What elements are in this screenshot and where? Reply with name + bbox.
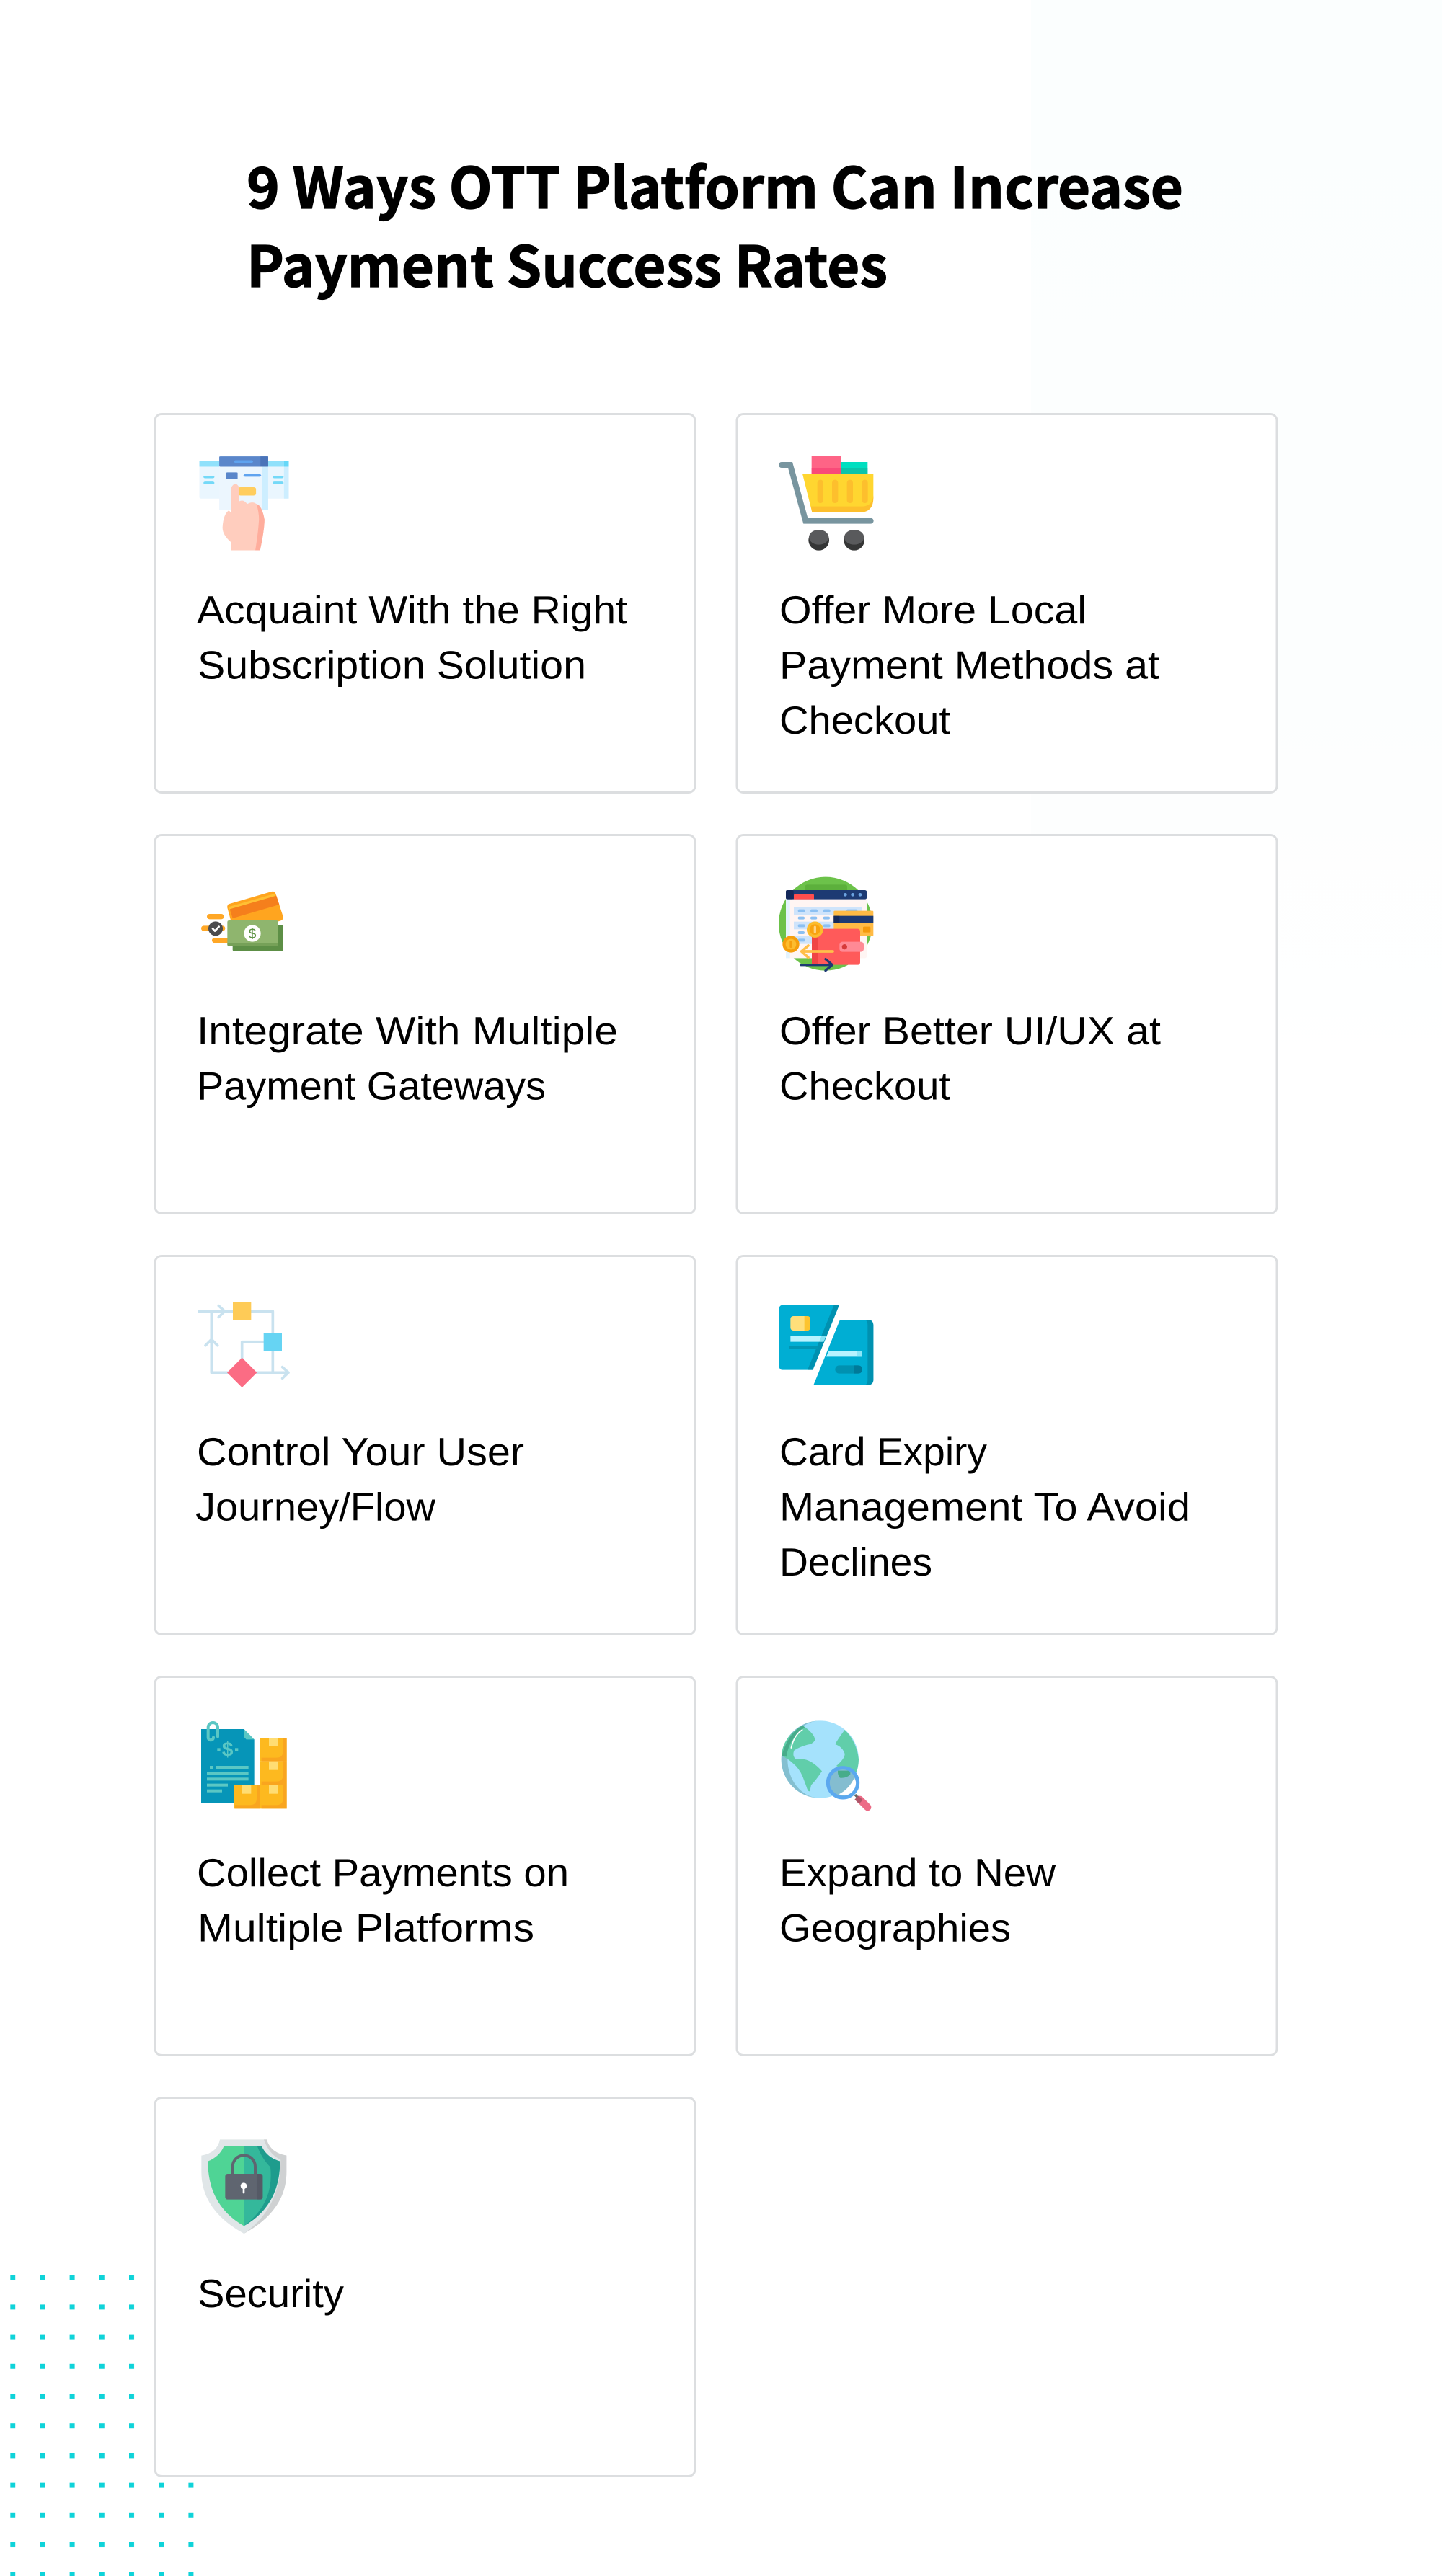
card text <box>197 1850 569 1950</box>
icon: hand tapping subscription screens <box>200 456 289 550</box>
card text <box>195 1429 524 1529</box>
card text <box>779 1850 1056 1950</box>
card text: Offer Better UI/UX at <box>779 1008 1161 1053</box>
title: Payment Success Rates <box>247 223 888 303</box>
title <box>247 144 1183 303</box>
card text: Subscription Solution <box>198 643 586 688</box>
card text: Geographies <box>779 1906 1011 1950</box>
card text: Collect Payments on <box>197 1850 569 1895</box>
card text: Payment Gateways <box>197 1064 546 1109</box>
icon: globe with magnifier <box>782 1720 867 1807</box>
icon: flow diagram <box>199 1302 288 1387</box>
panel: acquaint with the right subscription solution <box>155 414 695 793</box>
card text: Payment Methods at <box>779 643 1159 688</box>
icon: shopping cart <box>782 456 873 551</box>
card text: Control Your User <box>197 1429 524 1474</box>
decorative dot grid <box>10 2275 218 2576</box>
panel: control your user journey/flow <box>155 1256 695 1635</box>
icon: invoice and boxes <box>201 1723 287 1808</box>
card text: Acquaint With the Right <box>197 587 627 632</box>
card text <box>197 1008 618 1109</box>
panel: security <box>155 2097 695 2477</box>
icon: split credit card <box>779 1305 873 1385</box>
card text: Checkout <box>779 698 950 742</box>
card text: Security <box>198 2271 344 2316</box>
card text <box>779 1429 1190 1584</box>
panel: offer better ui/ux at checkout <box>737 835 1277 1214</box>
card text: Card Expiry <box>779 1429 987 1474</box>
panel: offer more local payment methods at checkout <box>737 414 1277 793</box>
panel: card expiry management to avoid declines <box>737 1256 1277 1635</box>
panel: collect payments on multiple platforms <box>155 1676 695 2056</box>
icon: shield with padlock <box>201 2139 286 2234</box>
card text: Expand to New <box>779 1850 1056 1895</box>
card text <box>779 1008 1161 1109</box>
card text: Offer More Local <box>779 587 1087 632</box>
card text: Integrate With Multiple <box>197 1008 618 1053</box>
card text: Multiple Platforms <box>198 1906 534 1950</box>
card text <box>779 587 1159 742</box>
title: 9 Ways OTT Platform Can Increase <box>247 144 1183 225</box>
icon: card and cash: $ <box>249 927 257 942</box>
panel: expand to new geographies <box>737 1676 1277 2056</box>
card text: Checkout <box>779 1064 950 1109</box>
card text: Declines <box>779 1540 932 1584</box>
card text: Management To Avoid <box>779 1485 1190 1529</box>
card text: Journey/Flow <box>195 1485 435 1529</box>
card text <box>197 587 627 688</box>
icon: invoice and boxes: $ <box>222 1738 234 1761</box>
icon: card and cash <box>201 892 283 951</box>
icon: checkout window with wallet and coins <box>779 877 873 971</box>
panel: integrate with multiple payment gateways <box>155 835 695 1214</box>
